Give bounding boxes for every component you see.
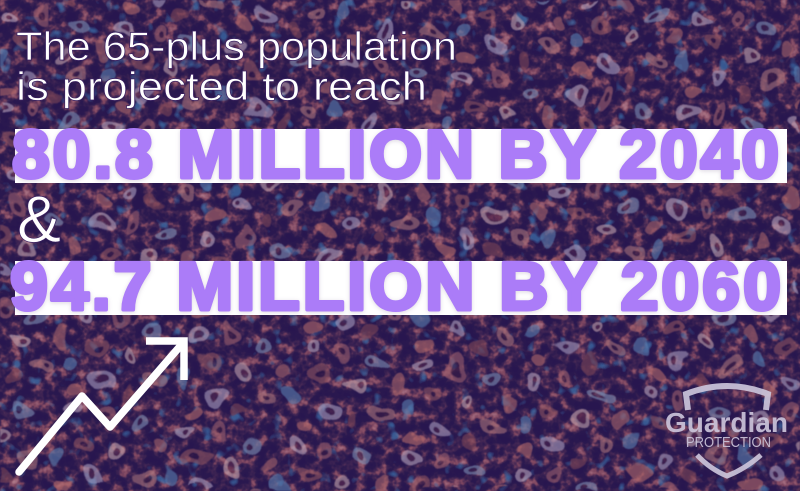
statistic: 94.7 million by 2060: 94.7 MILLION BY 2060 — [10, 248, 781, 324]
statistic: 80.8 million by 2040: 80.8 MILLION BY 2040 — [12, 116, 779, 192]
logo shield outline — [686, 386, 768, 476]
white bar: 2060 — [15, 261, 787, 315]
white bar: 2040 — [15, 129, 787, 183]
heading: intro text — [16, 25, 457, 109]
ampersand: & — [17, 182, 61, 256]
heading: intro text: The 65-plus population — [16, 25, 457, 69]
logo subtitle: PROTECTION — [686, 435, 771, 451]
logo: Guardian Protection — [665, 386, 788, 476]
heading: intro text: is projected to reach — [16, 65, 427, 109]
logo wordmark: Guardian — [665, 407, 788, 438]
icon: rising arrow — [19, 341, 184, 472]
